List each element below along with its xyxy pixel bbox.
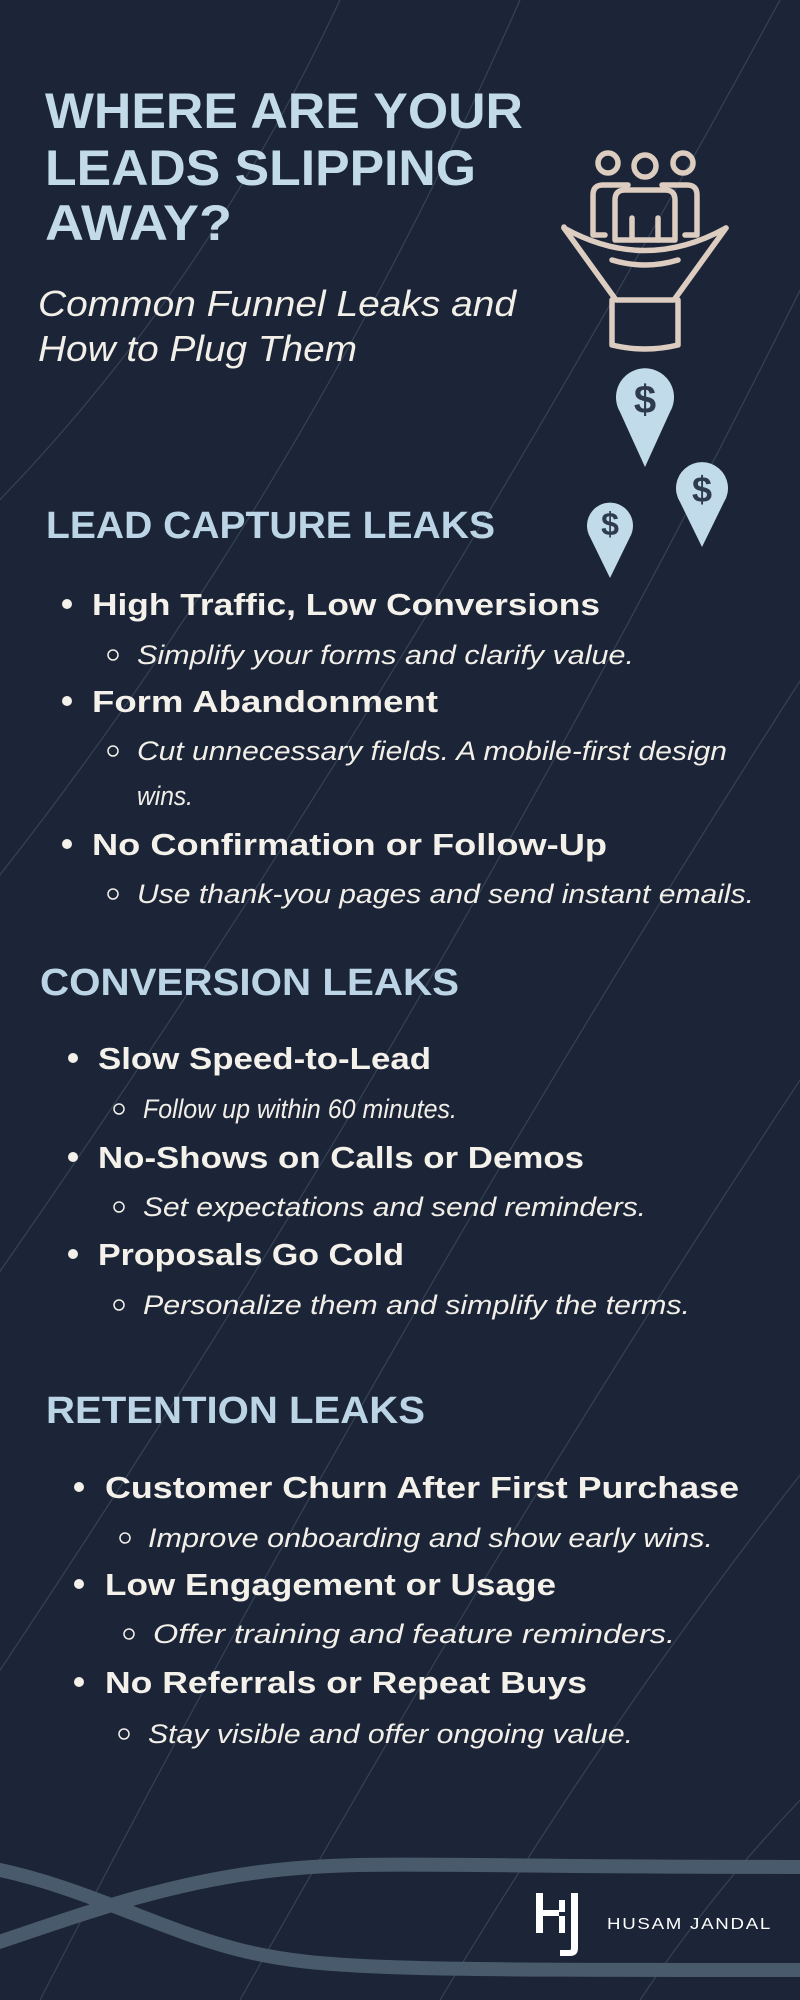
- icon: dollar pin large: $: [634, 378, 656, 422]
- list: conversion items: Set expectations and send reminders.: [143, 1192, 646, 1222]
- list: retention items: Offer training and feature reminders.: [153, 1619, 675, 1649]
- list: retention items: No Referrals or Repeat Buys: [105, 1665, 587, 1700]
- panel: conversion leaks: [40, 962, 690, 1320]
- panel: retention leaks: [46, 1390, 739, 1749]
- list: retention items: Low Engagement or Usage: [105, 1567, 556, 1602]
- list: retention items: [74, 1470, 739, 1749]
- subtitle: Common Funnel Leaks and: [38, 283, 517, 324]
- icon: dollar pin left: $: [601, 506, 619, 542]
- list: lead capture items: Form Abandonment: [92, 684, 438, 719]
- title: AWAY?: [45, 195, 232, 251]
- panel: lead capture leaks: [46, 505, 754, 909]
- list: lead capture items: Use thank-you pages and send instant emails.: [137, 879, 754, 909]
- list: lead capture items: High Traffic, Low Conversions: [92, 587, 600, 622]
- list: conversion items: Proposals Go Cold: [98, 1237, 404, 1272]
- icon: dollar pin left: [587, 503, 633, 578]
- list: lead capture items: [62, 587, 754, 909]
- list: retention items: Improve onboarding and show early wins.: [148, 1523, 713, 1553]
- logo: [536, 1893, 772, 1956]
- list: conversion items: Slow Speed-to-Lead: [98, 1041, 431, 1076]
- title: [45, 83, 523, 251]
- title: WHERE ARE YOUR: [45, 83, 523, 139]
- heading: retention leaks: RETENTION LEAKS: [46, 1390, 425, 1432]
- decorative bottom waves: [0, 1865, 800, 1970]
- title: LEADS SLIPPING: [45, 140, 476, 196]
- list: retention items: Stay visible and offer ongoing value.: [148, 1719, 633, 1749]
- list: conversion items: No-Shows on Calls or Demos: [98, 1140, 584, 1175]
- logo: HUSAM JANDAL: [607, 1916, 772, 1933]
- icon: funnel with people: [564, 153, 726, 349]
- subtitle: How to Plug Them: [38, 328, 357, 369]
- list: conversion items: [68, 1041, 690, 1320]
- list: lead capture items: No Confirmation or Follow-Up: [92, 827, 607, 862]
- icon: dollar pin large: [616, 368, 674, 467]
- icon: dollar pin right: [676, 462, 728, 547]
- heading: lead capture leaks: LEAD CAPTURE LEAKS: [46, 505, 495, 547]
- list: lead capture items: Simplify your forms and clarify value.: [137, 640, 634, 670]
- list: retention items: Customer Churn After First Purchase: [105, 1470, 739, 1505]
- subtitle: [38, 283, 517, 369]
- list: lead capture items: wins.: [137, 781, 193, 811]
- heading: conversion leaks: CONVERSION LEAKS: [40, 962, 459, 1004]
- list: conversion items: Follow up within 60 minutes.: [143, 1094, 457, 1124]
- list: conversion items: Personalize them and simplify the terms.: [143, 1290, 690, 1320]
- icon: dollar pin right: $: [692, 469, 712, 510]
- list: lead capture items: Cut unnecessary fields. A mobile-first design: [137, 736, 727, 766]
